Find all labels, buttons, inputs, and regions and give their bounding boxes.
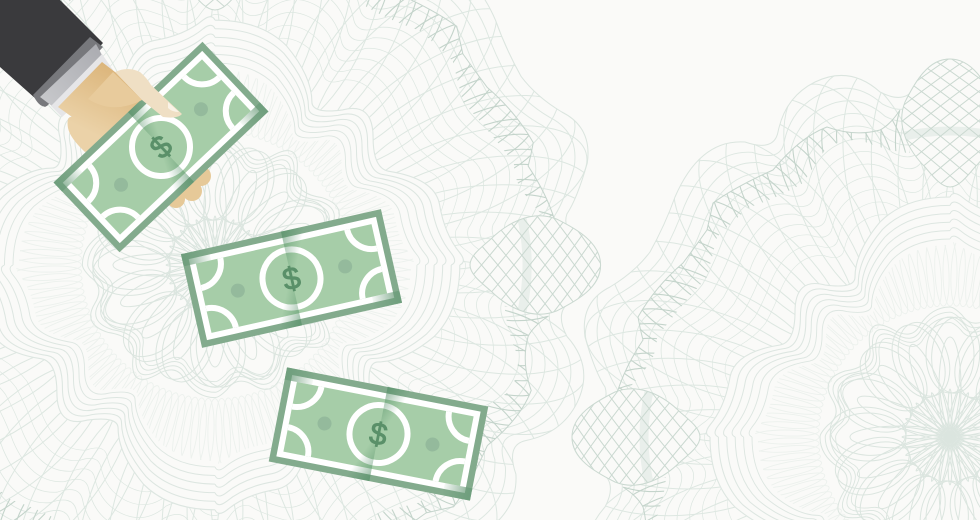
dollar sign: $ [367,415,390,453]
dollar sign: $ [279,260,304,297]
icon: thumb over bill [88,69,182,118]
icon: fingers behind bill [167,166,211,208]
bill 2 [166,194,417,363]
icon: thumb nail [168,102,179,112]
hand holding bill [0,0,211,208]
dollar sign: $ [143,128,179,166]
icon: palm [58,62,165,152]
bill 3 [254,353,503,515]
icon: sleeve edge [33,37,103,107]
bill 1 (held) [36,24,286,270]
icon: shirt cuff [40,44,102,106]
icon: jacket sleeve [0,0,103,107]
icon: white cuff edge [51,54,113,117]
